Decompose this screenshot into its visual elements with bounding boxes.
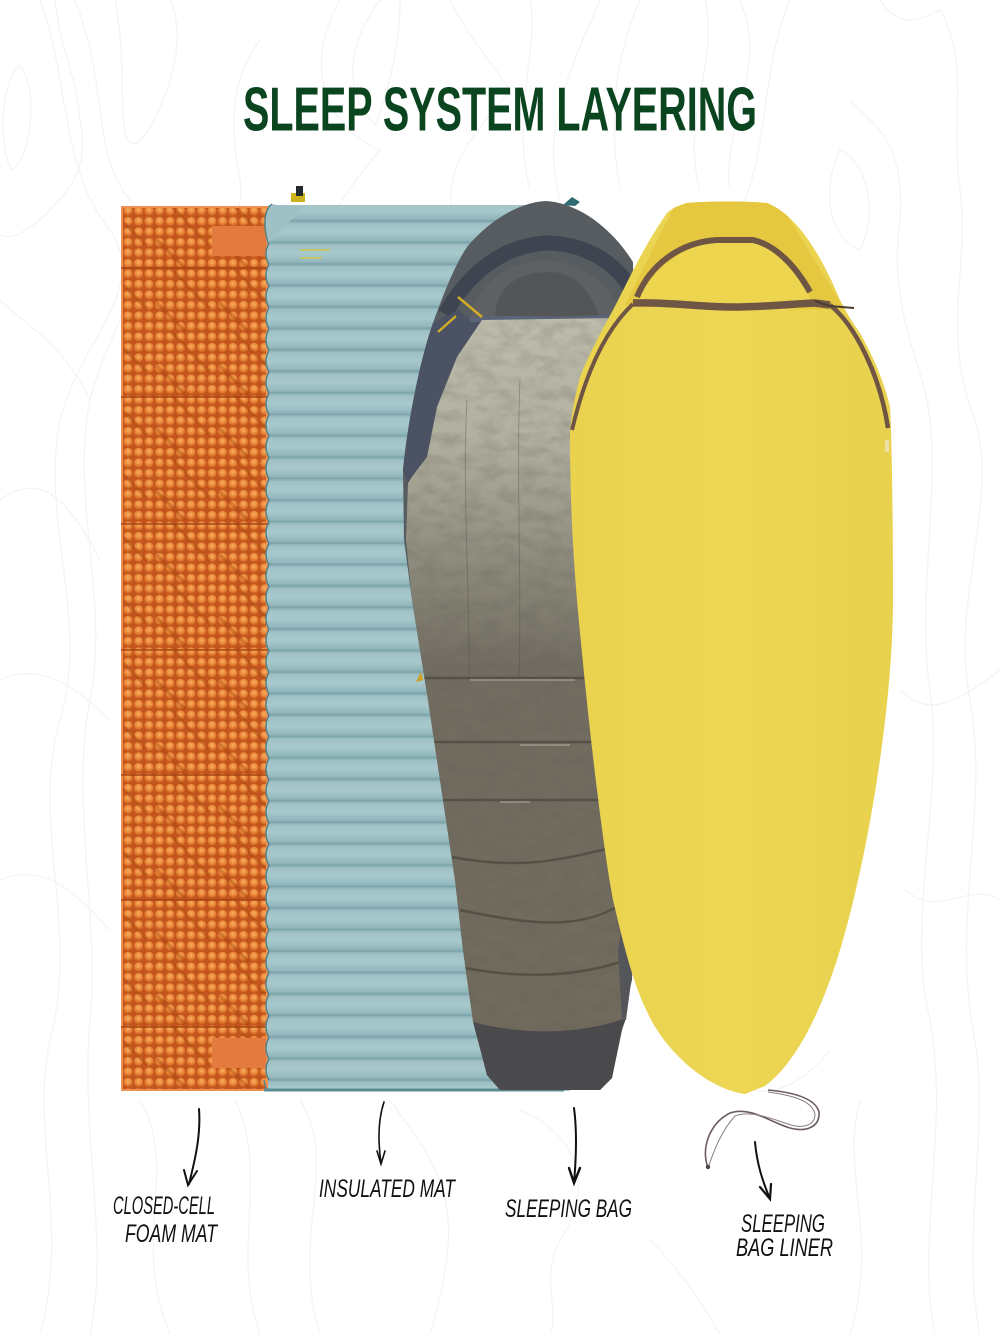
label: closed-cell foam mat: FOAM MAT [125,1220,218,1248]
brown hood opening trim [637,240,810,297]
arrow: sleeping bag [569,1108,580,1183]
closed-cell foam mat [121,206,268,1091]
label: sleeping bag liner: SLEEPING [741,1210,825,1238]
yellow zip pulls [438,297,482,332]
drawcord [705,1090,819,1168]
collar panel [403,310,482,483]
label: closed-cell foam mat [113,1192,218,1248]
arrow: closed-cell foam mat [184,1109,199,1185]
label: sleeping bag: SLEEPING BAG [505,1195,632,1223]
foot box [473,1018,626,1090]
label: sleeping bag liner: BAG LINER [736,1234,833,1262]
sleeping bag liner [560,195,900,1169]
body shell [400,318,640,1038]
sleeping bag [400,201,640,1090]
insulated mat [262,186,580,1092]
hood collar ring [445,243,632,314]
arrow: sleeping bag liner [755,1142,771,1199]
arrow: insulated mat [377,1102,385,1164]
label: closed-cell foam mat: CLOSED-CELL [113,1192,215,1220]
label: insulated mat: INSULATED MAT [319,1175,456,1203]
label: sleeping bag liner [736,1210,833,1262]
hood interior [470,260,625,320]
